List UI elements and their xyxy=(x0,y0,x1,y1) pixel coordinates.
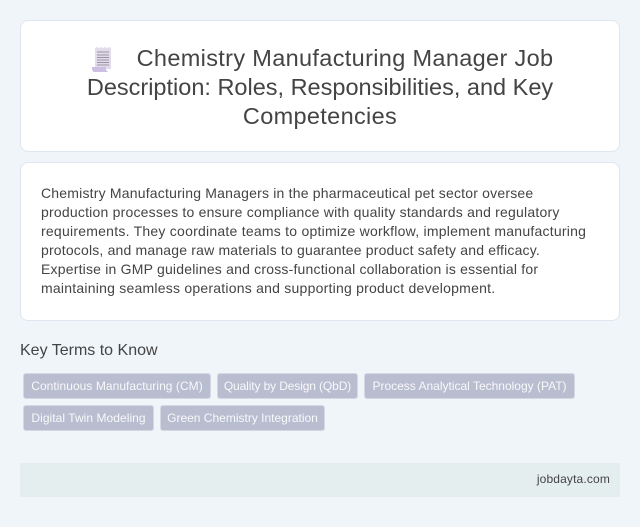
description panel xyxy=(20,162,620,321)
description text: production processes to ensure compliance with quality standards and regulatory xyxy=(41,204,560,220)
title: Description: Roles, Responsibilities, and Key xyxy=(87,74,553,100)
tag: continuous manufacturing: Continuous Manufacturing (CM) xyxy=(31,379,203,393)
description text xyxy=(41,185,586,296)
description text: protocols, and manage raw materials to guarantee product safety and efficacy. xyxy=(41,242,540,258)
tag: green chemistry integration xyxy=(160,405,325,431)
tag: process analytical technology xyxy=(364,373,575,399)
heading: key terms: Key Terms to Know xyxy=(20,342,158,359)
description text: requirements. They coordinate teams to optimize workflow, implement manufacturing xyxy=(41,223,586,239)
tag: continuous manufacturing xyxy=(23,373,211,399)
title panel xyxy=(20,20,620,152)
description text: maintaining seamless operations and supporting product development. xyxy=(41,280,495,296)
description text: Expertise in GMP guidelines and cross-functional collaboration is essential for xyxy=(41,261,538,277)
description text: Chemistry Manufacturing Managers in the pharmaceutical pet sector oversee xyxy=(41,185,533,201)
tag: digital twin modeling: Digital Twin Modeling xyxy=(31,411,146,425)
key terms tags xyxy=(23,373,575,431)
tag: green chemistry integration: Green Chemistry Integration xyxy=(167,411,318,425)
title xyxy=(87,45,553,129)
tag: quality by design xyxy=(217,373,358,399)
footer text: jobdayta.com xyxy=(537,472,610,486)
footer bar xyxy=(20,463,620,497)
tag: process analytical technology: Process Analytical Technology (PAT) xyxy=(372,379,567,393)
tag: quality by design: Quality by Design (QbD) xyxy=(224,379,351,393)
icon: document scroll xyxy=(92,47,111,72)
tag: digital twin modeling xyxy=(23,405,154,431)
title: Competencies xyxy=(243,103,397,129)
title: Chemistry Manufacturing Manager Job xyxy=(137,45,553,71)
